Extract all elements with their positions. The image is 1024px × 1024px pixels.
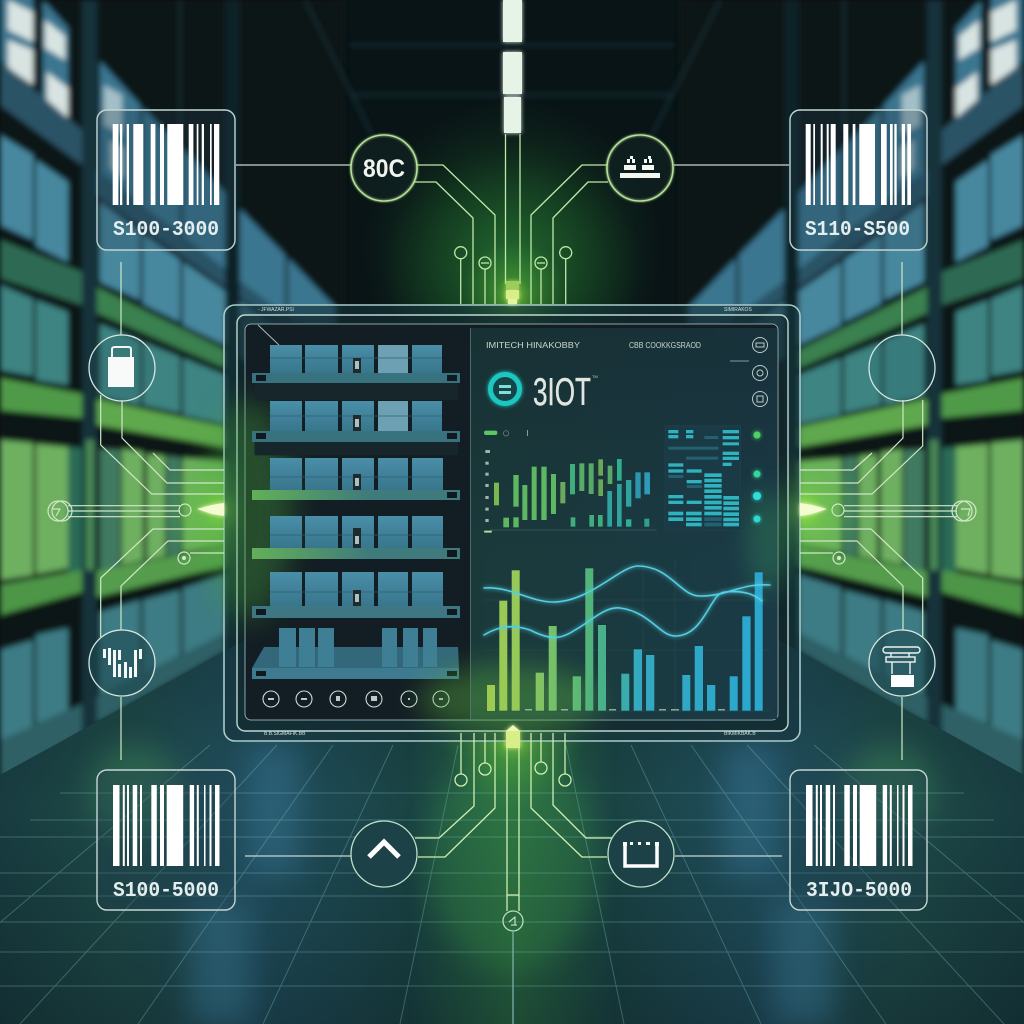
node icon: scanner tag [89, 335, 155, 401]
barcode card: top left [97, 110, 235, 250]
panel: analytics view [420, 328, 792, 735]
analytics header text: CBB COOKKGSRAOD [629, 340, 701, 350]
shelf control buttons [263, 691, 449, 707]
line chart waves [484, 566, 770, 638]
frame micro labels: - JFWAZAR.PSI [258, 307, 294, 313]
main bar chart [484, 560, 770, 711]
node icon: bar signal [89, 630, 155, 696]
top connectors [236, 134, 789, 304]
node: 80C temperature: 80C [363, 155, 405, 183]
data table [665, 426, 741, 530]
shelf row 2 [252, 401, 460, 455]
node icon: bin [608, 821, 674, 887]
node icon: chevron up [351, 821, 417, 887]
analytics header text: IMITECH HINAKOBBY [486, 340, 580, 350]
barcode card: bottom left [97, 770, 235, 910]
barcode card: bottom left: S100-5000 [113, 880, 219, 903]
analytics header text [486, 340, 701, 350]
circuit connector lines [48, 134, 976, 1024]
small bar chart [484, 430, 657, 533]
ceiling light strip [503, 0, 522, 133]
node icon: stacked platform [869, 630, 935, 696]
barcode card: bottom right: 3IJO-5000 [806, 880, 912, 903]
shelf row 4 [252, 516, 460, 559]
barcode card: top left: S100-3000 [113, 219, 219, 242]
status dots [753, 432, 761, 522]
panel: shelf view [203, 325, 470, 719]
shelf row 6: containers [252, 628, 459, 679]
frame micro labels: B.B.SIGMAFIK.BB [264, 731, 306, 737]
bottom connectors [245, 733, 782, 1024]
frame micro labels: SIMIRAKOS [724, 307, 752, 313]
barcode card: top right [790, 110, 927, 250]
frame micro labels: BIKMIKBAK.B [724, 731, 756, 737]
panel: main dashboard frame [224, 305, 800, 741]
glow halos around panel connectors [160, 241, 864, 808]
barcode card: bottom right [790, 770, 927, 910]
node: empty ring [869, 335, 935, 401]
brand name: 3IOT [533, 371, 591, 414]
shelf row 1 [252, 345, 460, 400]
shelf row 5 [252, 572, 460, 618]
glowing connector plugs [197, 281, 827, 748]
left connectors [48, 262, 224, 760]
floor grid [0, 745, 1024, 1024]
barcode card: top right: S110-S500 [805, 219, 910, 242]
icon: teal logo ring [490, 374, 520, 404]
node icon: pallet stock [607, 135, 673, 201]
right connectors [800, 262, 976, 760]
side action icons [730, 338, 768, 406]
shelf row 3 [252, 458, 460, 500]
node: 80C temperature [351, 135, 417, 201]
panel: analytics view: TM [592, 374, 598, 379]
frame micro labels [258, 307, 756, 737]
